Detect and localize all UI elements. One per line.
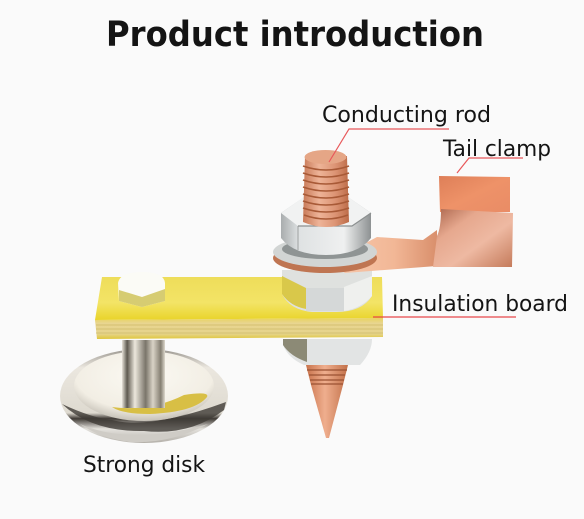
board top face [95,277,383,320]
board laminated edge [95,318,383,339]
label: strong disk: Strong disk [83,453,205,478]
copper ring and steel washer [273,237,377,273]
copper spike [306,365,348,438]
leader: insulation board [373,316,516,318]
label: insulation board: Insulation board [392,292,568,317]
leader: conducting rod [329,129,449,162]
insulation board [95,277,383,339]
magnet stem [122,340,165,408]
lug tongue [330,230,437,273]
label: tail clamp: Tail clamp [442,137,551,162]
conducting rod [303,150,349,227]
hex nut on top [281,197,371,255]
lower nut under board [283,339,372,365]
leader: tail clamp [457,158,523,173]
label: conducting rod: Conducting rod [322,103,491,128]
tail clamp [433,176,513,267]
bolt head on board [118,272,165,307]
upper nut on board [282,270,372,312]
clamp back [439,176,510,212]
title: Product introduction [106,15,484,55]
strong disk magnet [60,340,228,443]
clamp front [433,209,513,267]
